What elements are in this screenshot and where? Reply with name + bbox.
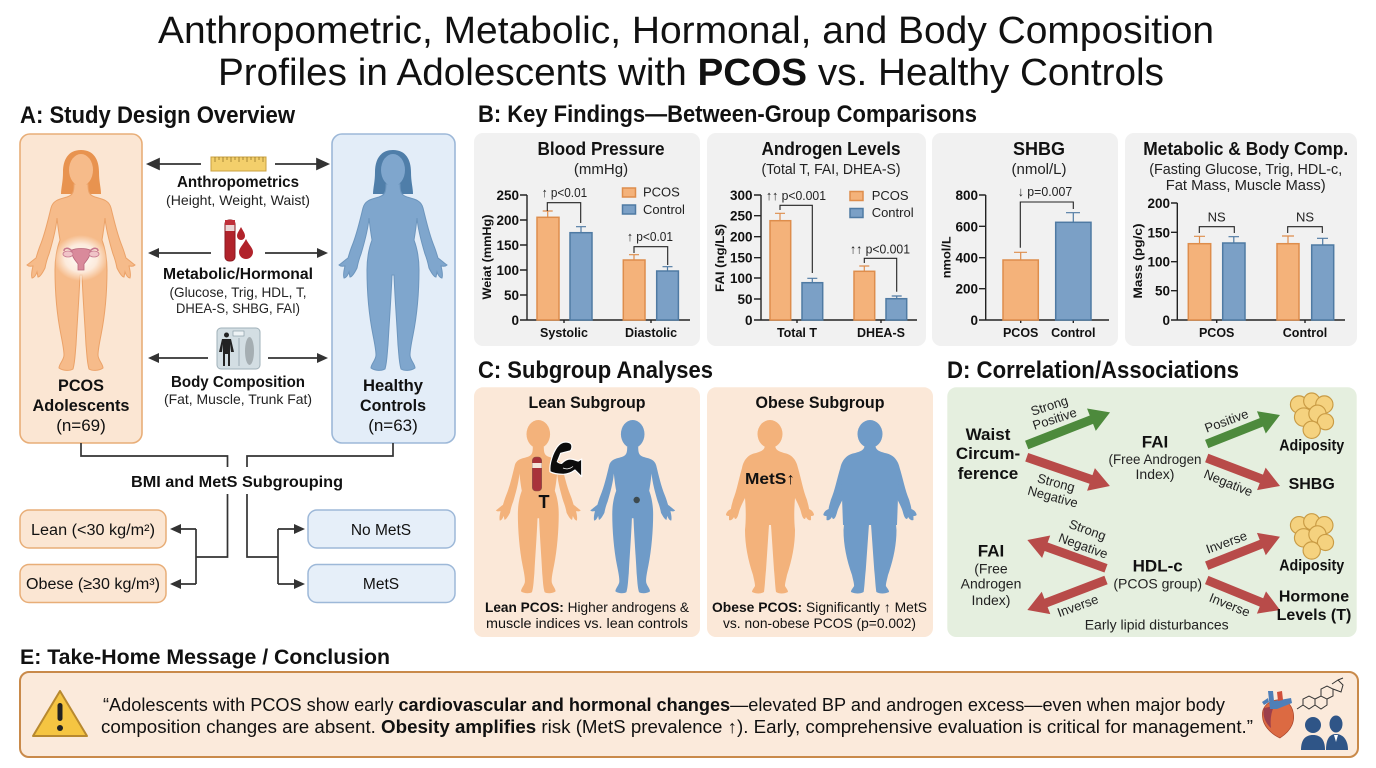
label: healthy controls: (n=63) [368, 416, 418, 435]
axes: 250 [730, 209, 752, 224]
label: PCOS adolescents [32, 376, 130, 435]
panel: lean subgroup [474, 387, 700, 637]
icon: blood tube and drops [225, 220, 253, 261]
axes: 300 [730, 188, 752, 203]
legend: Control [872, 205, 914, 220]
arrow label: strong positive: Positive [1031, 405, 1079, 433]
label: MetS up: MetS↑ [745, 471, 795, 488]
axes: Mass (pg/c) [1131, 224, 1145, 298]
axes: DHEA-S [857, 326, 905, 340]
node: HDL-c: (PCOS group) [1113, 575, 1202, 591]
node: waist circumference: ference [958, 464, 1018, 483]
legend [850, 188, 914, 220]
chart title: Metabolic & Body Comp. [1143, 139, 1348, 159]
label: healthy controls [360, 376, 426, 435]
arrow label: strong negative lower: Strong [1067, 516, 1108, 543]
axes: Control [1051, 326, 1096, 340]
axes: 600 [955, 219, 978, 234]
label: BMI and MetS subgrouping: BMI and MetS Subgrouping [131, 474, 343, 491]
node: FAI lower: Index) [972, 592, 1010, 608]
axes: 150 [496, 238, 519, 253]
axes: 200 [496, 213, 519, 228]
axes: 150 [730, 251, 752, 266]
axes [1131, 196, 1345, 340]
chart title: SHBG [1013, 139, 1065, 159]
box: MetS [308, 564, 455, 602]
axes: PCOS [1199, 326, 1234, 340]
icon: fat cells lower [1290, 514, 1334, 559]
caption: obese: vs. non-obese PCOS (p=0.002) [723, 615, 916, 631]
significance bracket: ↓ p=0.007 [1018, 184, 1072, 199]
arrow label: strong negative: Negative [1026, 483, 1080, 511]
label: T: T [538, 492, 550, 512]
icon: blood tube [532, 457, 542, 491]
box: lean: Lean (<30 kg/m²) [31, 522, 155, 539]
significance brackets: ↑ p<0.01 [542, 185, 587, 200]
heading: obese subgroup: Obese Subgroup [756, 394, 884, 412]
node: FAI lower: Androgen [961, 575, 1021, 591]
figure: control body [339, 150, 447, 370]
icon: uterus [54, 235, 108, 281]
heading D: D: Correlation/Associations [947, 357, 1239, 384]
axes: 0 [970, 313, 978, 328]
arrow: FAI to SHBG [1202, 447, 1284, 497]
chart title [538, 139, 664, 178]
axes: 50 [1155, 284, 1170, 299]
arrow label: positive: Positive [1203, 406, 1250, 436]
node: waist circumference: Waist [966, 425, 1011, 444]
text: metabolic: Metabolic/Hormonal [163, 266, 313, 283]
icon: steroid molecule [1297, 678, 1343, 709]
arrows: anthropometrics [148, 159, 328, 169]
figure: lean control [590, 420, 675, 593]
axes: 100 [1147, 255, 1170, 270]
arrow label: negative: Negative [1202, 466, 1255, 499]
axes: 50 [737, 292, 752, 307]
text: anthropometrics [166, 174, 310, 208]
axes: 0 [511, 313, 519, 328]
icon: flexed muscle [550, 442, 582, 477]
significance brackets [766, 188, 910, 292]
caption: obese [712, 599, 927, 631]
title: Profiles in Adolescents with PCOS vs. Healthy Controls [218, 52, 1164, 94]
box: no MetS [308, 510, 455, 548]
text: anthropometrics: Anthropometrics [177, 174, 299, 191]
legend: PCOS [643, 184, 680, 200]
figure: lean PCOS [496, 420, 581, 593]
bars [1003, 213, 1091, 320]
label: healthy controls: Controls [360, 396, 426, 415]
chart title [762, 139, 900, 178]
axes: 200 [955, 282, 978, 297]
panel: blood pressure chart [474, 133, 700, 346]
node: HDL-c: HDL-c [1133, 557, 1183, 576]
legend [622, 184, 685, 217]
icon: warning triangle [33, 691, 87, 736]
NS brackets: NS [1296, 210, 1314, 225]
arrow label: inverse lower right: Inverse [1207, 590, 1252, 620]
box: lean [20, 510, 166, 548]
axes: Control [1283, 326, 1327, 340]
arrow label: strong positive [1029, 393, 1079, 433]
node: FAI lower: (Free [974, 560, 1008, 576]
axes: PCOS [1003, 326, 1038, 340]
section B: key findings [474, 101, 1357, 346]
arrow: HDL to FAI inverse [1023, 569, 1110, 621]
significance brackets: ↑↑ p<0.001 [766, 188, 826, 203]
legend: PCOS [872, 188, 909, 203]
panel: metabolic and body composition chart [1125, 133, 1357, 346]
caption: lean [485, 599, 690, 631]
label: healthy controls: Healthy [363, 376, 424, 395]
axes: 50 [504, 288, 519, 303]
panel: androgen levels chart [707, 133, 926, 346]
axes: Total T [777, 326, 817, 340]
heading C: C: Subgroup Analyses [478, 357, 713, 384]
text: body composition: (Fat, Muscle, Trunk Fat) [164, 391, 312, 407]
label: PCOS adolescents: Adolescents [32, 396, 130, 415]
arrow: HDL to adiposity [1202, 526, 1284, 577]
node: FAI: FAI [1142, 433, 1168, 452]
significance brackets [542, 185, 673, 265]
chart title: Fat Mass, Muscle Mass) [1166, 177, 1326, 194]
label: PCOS adolescents: PCOS [58, 376, 104, 395]
bars [1188, 236, 1334, 320]
significance bracket [1018, 184, 1073, 248]
node: FAI lower [961, 542, 1021, 608]
arrows: metabolic [148, 248, 328, 258]
text: metabolic: (Glucose, Trig, HDL, T, [170, 284, 306, 300]
chart title: (mmHg) [574, 161, 628, 178]
caption: lean: Lean PCOS: Higher androgens & [485, 599, 690, 615]
text: metabolic [163, 266, 313, 316]
arrow label: inverse upper right: Inverse [1204, 528, 1249, 557]
axes: 150 [1147, 225, 1170, 240]
conclusion text: composition changes are absent. Obesity amplifies risk (MetS prevalence ↑). Early, comprehensive evaluation is critical for management.” [101, 717, 1253, 737]
axes: 800 [955, 188, 978, 203]
axes: 200 [730, 230, 752, 245]
box: obese: Obese (≥30 kg/m³) [26, 576, 160, 593]
label: PCOS adolescents: (n=69) [56, 416, 106, 435]
box: MetS: MetS [363, 576, 399, 593]
significance brackets: ↑ p<0.01 [627, 229, 673, 244]
figure: PCOS body [27, 150, 135, 370]
caption: lean: muscle indices vs. lean controls [486, 615, 688, 631]
arrow label: strong positive: Strong [1029, 393, 1070, 419]
arrow: waist to FAI positive [1022, 401, 1114, 456]
arrows: body composition [148, 353, 328, 363]
heading: lean subgroup: Lean Subgroup [528, 394, 646, 412]
axes [713, 188, 917, 340]
arrow: HDL to hormone levels [1202, 569, 1285, 621]
text: body composition [164, 374, 312, 407]
axes [940, 188, 1109, 340]
axes: 400 [955, 251, 978, 266]
icon: marker on control abdomen [634, 497, 640, 503]
heading E: E: Take-Home Message / Conclusion [20, 646, 390, 669]
icon: body composition scale [217, 328, 260, 369]
arrow label: strong negative: Strong [1036, 470, 1077, 495]
section C: subgroup analyses [474, 357, 933, 637]
node: HDL-c [1113, 557, 1202, 591]
axes: Weiat (mmHg) [480, 214, 494, 300]
axes: Systolic [540, 326, 588, 340]
arrow label: inverse left: Inverse [1055, 591, 1100, 620]
axes: Diastolic [625, 326, 677, 340]
NS brackets [1199, 210, 1322, 233]
text: body composition: Body Composition [171, 374, 305, 391]
chart title: Androgen Levels [762, 139, 900, 159]
box: obese [20, 564, 166, 602]
node: SHBG: SHBG [1289, 476, 1335, 493]
chart title: Blood Pressure [538, 139, 664, 159]
panel: obese subgroup [707, 387, 933, 637]
figure: obese PCOS [726, 420, 814, 594]
text: metabolic: DHEA-S, SHBG, FAI) [176, 300, 300, 316]
text: anthropometrics: (Height, Weight, Waist) [166, 192, 310, 208]
icon: people [1301, 716, 1348, 750]
axes [480, 188, 690, 340]
chart title [1143, 139, 1348, 194]
arrow label: strong negative lower: Negative [1057, 530, 1110, 562]
bars [537, 211, 678, 320]
panel A: study design overview [20, 102, 455, 602]
heading B: B: Key Findings—Between-Group Comparisons [478, 101, 977, 128]
NS brackets: NS [1208, 210, 1226, 225]
node: adiposity upper: Adiposity [1279, 438, 1344, 455]
axes: 100 [496, 263, 519, 278]
arrow: FAI to adiposity [1202, 404, 1284, 455]
node: hormone levels [1277, 589, 1351, 624]
connectors: subgroup arrows [170, 494, 305, 589]
node: hormone levels: Hormone [1279, 589, 1349, 606]
arrow: HDL to FAI strong negative [1023, 529, 1110, 580]
axes: 200 [1147, 196, 1170, 211]
chart title: (Total T, FAI, DHEA-S) [762, 161, 900, 178]
chart title [1011, 139, 1067, 178]
node: waist circumference [956, 425, 1020, 483]
node: hormone levels: Levels (T) [1277, 607, 1351, 624]
icon: fat cells upper [1290, 393, 1334, 438]
axes: nmol/L [940, 236, 954, 278]
connectors: cohort to subgrouping [81, 443, 393, 467]
note: early lipid disturbances: Early lipid disturbances [1085, 616, 1229, 632]
arrow: waist to FAI negative [1023, 446, 1114, 497]
card: PCOS adolescents [20, 134, 142, 443]
axes: 250 [496, 188, 519, 203]
panel: SHBG chart [932, 133, 1118, 346]
section D: correlations [947, 357, 1357, 637]
axes: 0 [745, 313, 752, 328]
conclusion banner [20, 672, 1358, 757]
node: waist circumference: Circum- [956, 444, 1020, 463]
node: FAI [1108, 433, 1202, 482]
conclusion text [101, 695, 1253, 737]
box: no MetS: No MetS [351, 522, 411, 539]
axes: FAI (ng/L$) [713, 224, 727, 292]
chart title: (Fasting Glucose, Trig, HDL-c, [1149, 161, 1342, 178]
section E: take-home message [20, 646, 1358, 757]
axes: 100 [730, 271, 752, 286]
chart title: (nmol/L) [1011, 161, 1067, 178]
title: Anthropometric, Metabolic, Hormonal, and Body Composition [158, 10, 1214, 52]
title [158, 10, 1214, 94]
card: healthy controls [332, 134, 455, 443]
node: FAI: Index) [1136, 466, 1174, 482]
legend: Control [643, 202, 685, 217]
node: adiposity lower: Adiposity [1279, 558, 1344, 575]
arrow label: strong negative lower [1057, 516, 1110, 562]
node: FAI: (Free Androgen [1108, 451, 1202, 467]
icon: ruler [211, 157, 266, 171]
arrow label: strong negative [1026, 470, 1080, 511]
bars [770, 213, 907, 320]
panel D background [947, 387, 1357, 637]
significance brackets: ↑↑ p<0.001 [850, 241, 910, 256]
figure: obese control [823, 420, 917, 594]
caption: obese: Obese PCOS: Significantly ↑ MetS [712, 599, 927, 615]
heading A: A: Study Design Overview [20, 102, 295, 129]
node: FAI lower: FAI [978, 542, 1004, 561]
icon: heart [1262, 691, 1294, 738]
conclusion text: “Adolescents with PCOS show early cardiovascular and hormonal changes—elevated BP and androgen excess—even when major body [103, 695, 1225, 715]
axes: 0 [1162, 313, 1170, 328]
